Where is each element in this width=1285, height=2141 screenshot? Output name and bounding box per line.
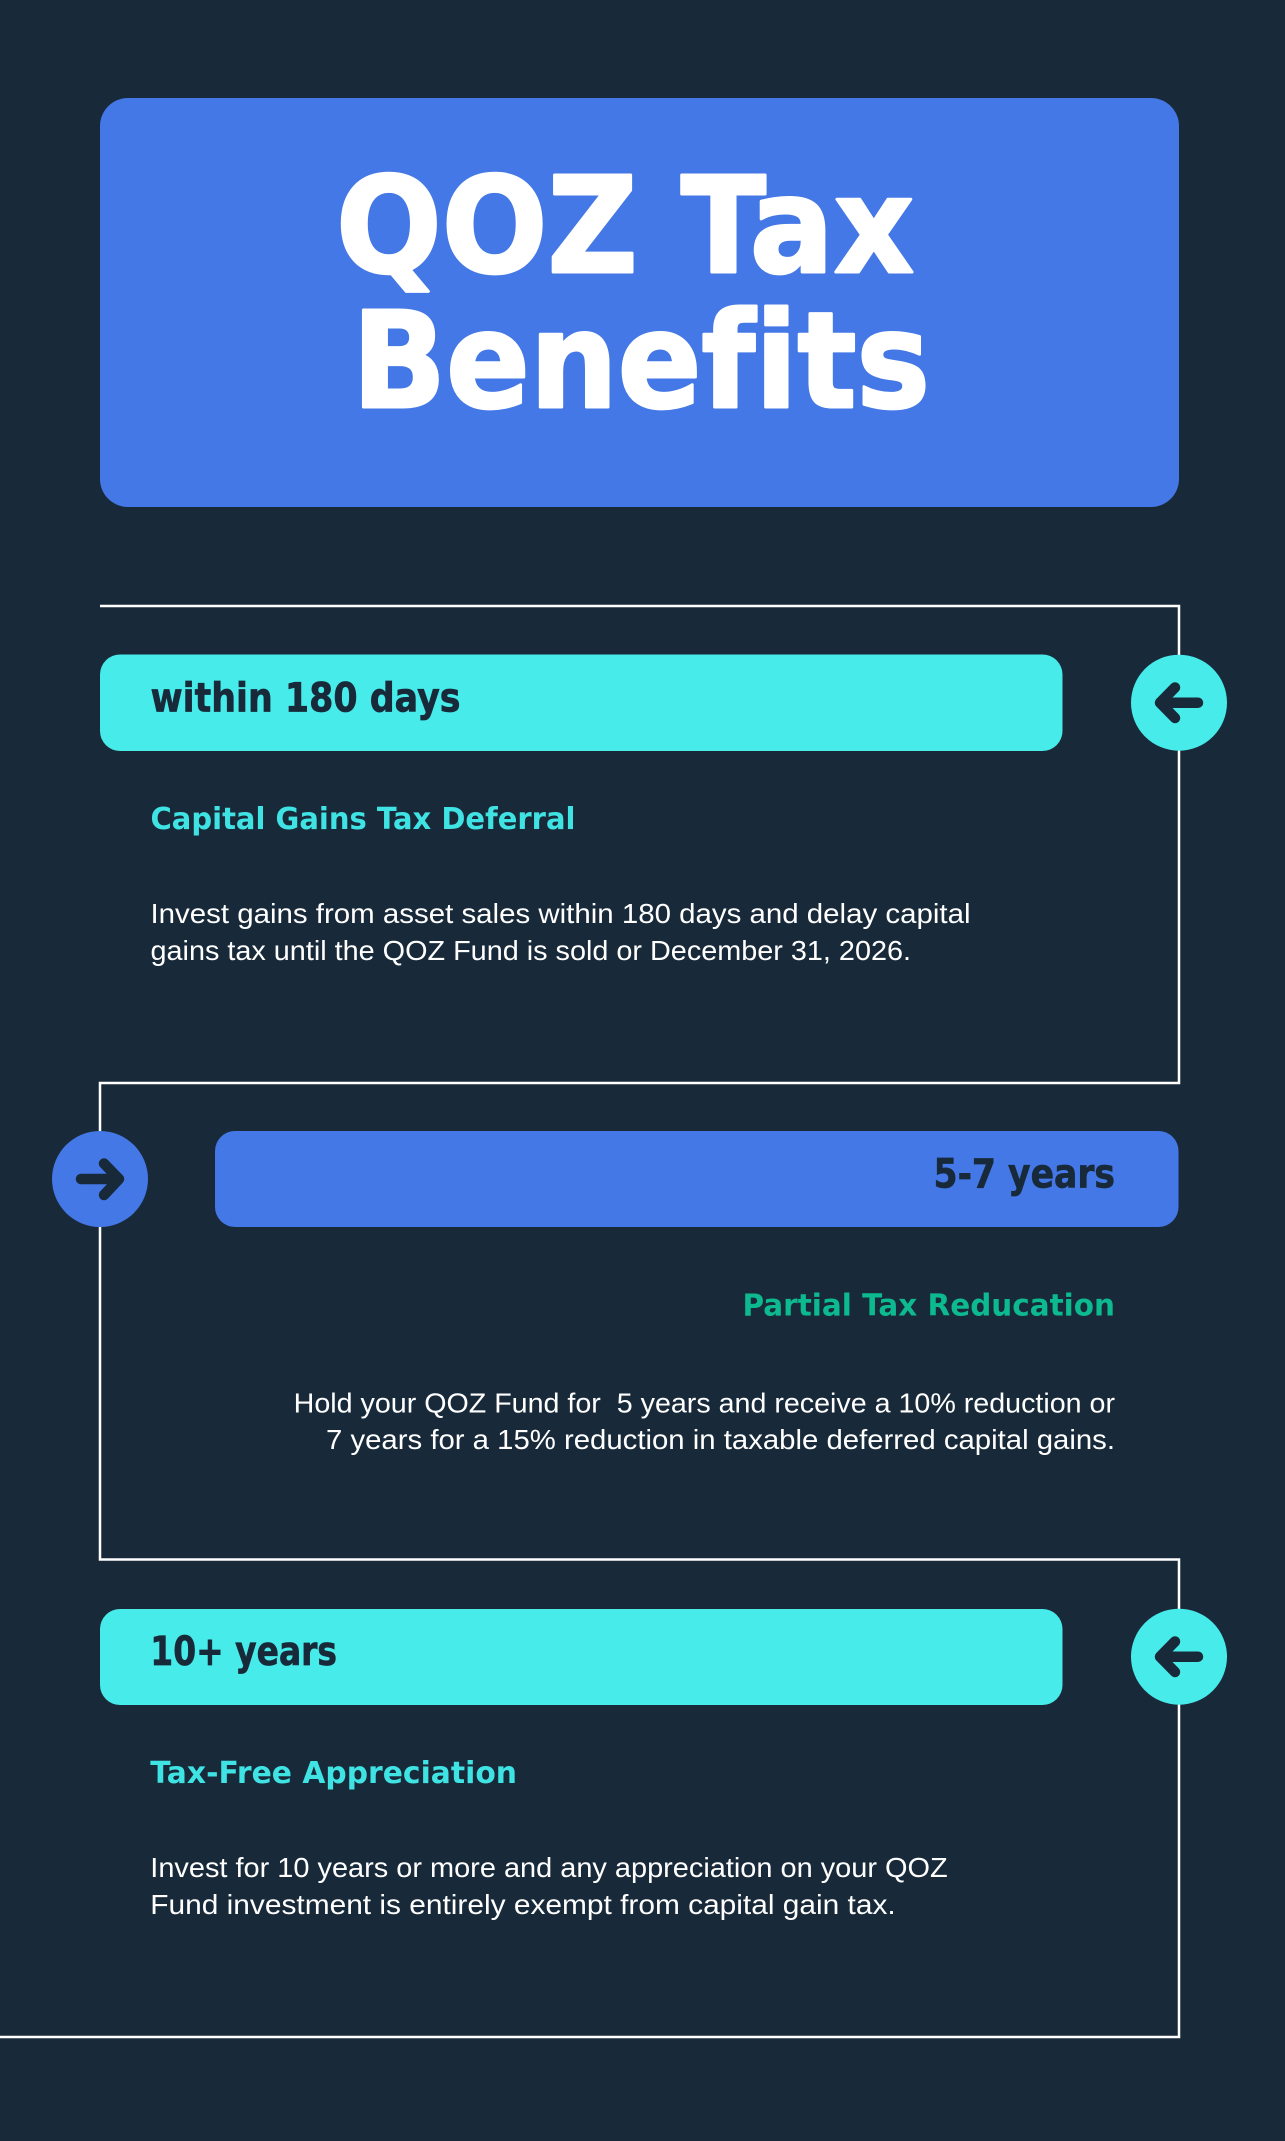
pill: within 180 days xyxy=(100,654,1062,751)
text block: reduction description: Hold your QOZ Fund for 5 years and receive a 10% reduction or xyxy=(294,1388,1115,1419)
panel: within 180 days xyxy=(100,654,1227,966)
icon: right arrow xyxy=(52,1131,148,1227)
title: QOZ Tax xyxy=(336,150,914,304)
pill: 5-7 years xyxy=(215,1131,1178,1227)
heading: capital gains tax deferral: Capital Gains Tax Deferral xyxy=(150,802,576,837)
text block: deferral description xyxy=(150,898,970,966)
panel: 10+ years xyxy=(100,1609,1227,1920)
text block: appreciation description xyxy=(150,1852,948,1920)
text block: appreciation description: Fund investment is entirely exempt from capital gain tax. xyxy=(150,1889,896,1920)
pill: 10+ years xyxy=(100,1609,1062,1705)
text block: deferral description: gains tax until the QOZ Fund is sold or December 31, 2026. xyxy=(150,935,911,966)
connector line xyxy=(0,606,1179,2037)
title banner xyxy=(100,98,1179,507)
icon: left arrow xyxy=(1131,655,1227,751)
panel: 5-7 years xyxy=(52,1131,1178,1455)
pill: 10+ years: 10+ years xyxy=(150,1629,337,1675)
heading: partial tax reducation: Partial Tax Reducation xyxy=(742,1289,1115,1324)
pill: within 180 days: within 180 days xyxy=(150,676,460,722)
text block: appreciation description: Invest for 10 years or more and any appreciation on your QOZ xyxy=(150,1852,948,1883)
text block: deferral description: Invest gains from asset sales within 180 days and delay capital xyxy=(150,898,970,929)
title xyxy=(336,150,930,439)
text block: reduction description: 7 years for a 15% reduction in taxable deferred capital gains. xyxy=(326,1424,1115,1455)
pill: 5-7 years: 5-7 years xyxy=(934,1152,1115,1198)
title: Benefits xyxy=(352,285,930,439)
text block: reduction description xyxy=(294,1388,1115,1455)
icon: left arrow xyxy=(1131,1609,1227,1705)
heading: tax-free appreciation: Tax-Free Appreciation xyxy=(150,1756,517,1791)
